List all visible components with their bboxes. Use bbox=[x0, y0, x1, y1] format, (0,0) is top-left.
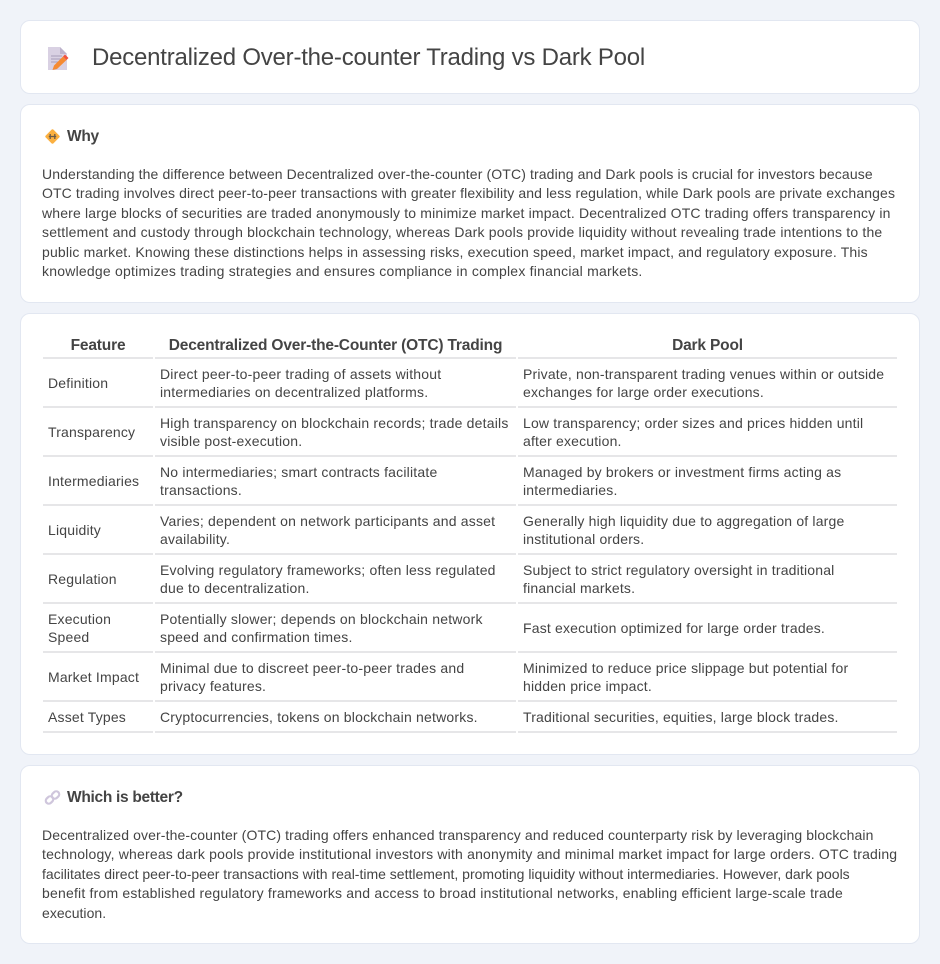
heading: why: Why bbox=[67, 128, 99, 145]
title: Decentralized Over-the-counter Trading vs Dark Pool bbox=[92, 44, 645, 71]
row: asset types bbox=[48, 709, 839, 725]
row: regulation: Subject to strict regulatory oversight in traditional bbox=[523, 562, 834, 578]
text: why paragraph bbox=[42, 166, 895, 279]
row: regulation: financial markets. bbox=[523, 580, 635, 596]
row: liquidity: availability. bbox=[160, 531, 230, 547]
row: definition: Private, non-transparent trading venues within or outside bbox=[523, 366, 884, 382]
row: market impact: privacy features. bbox=[160, 678, 266, 694]
row: intermediaries bbox=[48, 464, 841, 498]
row: liquidity: Liquidity bbox=[48, 522, 101, 538]
row: market impact bbox=[48, 660, 848, 694]
table header: Feature bbox=[71, 337, 125, 354]
text: why paragraph: OTC trading involves direct peer-to-peer transactions with greater flexibility and less regulation, while Dark pools are private exchanges bbox=[42, 185, 895, 201]
row: execution speed bbox=[48, 611, 825, 645]
table header bbox=[71, 337, 743, 354]
row: execution speed: Execution bbox=[48, 611, 111, 627]
row: definition bbox=[48, 366, 884, 400]
panel: title header bbox=[20, 20, 920, 94]
row: liquidity: institutional orders. bbox=[523, 531, 644, 547]
row: intermediaries: No intermediaries; smart contracts facilitate bbox=[160, 464, 437, 480]
row: transparency: after execution. bbox=[523, 433, 622, 449]
text: why paragraph: Understanding the difference between Decentralized over-the-counter (OTC) trading and Dark pools is crucial for investors because bbox=[42, 166, 873, 182]
row: asset types: Cryptocurrencies, tokens on blockchain networks. bbox=[160, 709, 478, 725]
text: which is better paragraph: technology, whereas dark pools provide institutional investors with anonymity and minimal market impact for large orders. OTC trading bbox=[42, 846, 897, 862]
text: which is better paragraph: facilitates direct peer-to-peer transactions with real-time settlement, promoting liquidity without intermediaries. However, dark pools bbox=[42, 866, 850, 882]
row: regulation: due to decentralization. bbox=[160, 580, 310, 596]
row: execution speed: Fast execution optimized for large order trades. bbox=[523, 620, 825, 636]
text: why paragraph: public market. Knowing these distinctions helps in assessing risks, execution speed, market impact, and regulatory exposure. This bbox=[42, 244, 868, 260]
panel: comparison table bbox=[20, 313, 920, 755]
row: transparency: Low transparency; order sizes and prices hidden until bbox=[523, 415, 863, 431]
row: transparency: visible post-execution. bbox=[160, 433, 302, 449]
row: definition: intermediaries on decentralized platforms. bbox=[160, 384, 428, 400]
text: why paragraph: knowledge optimizes trading strategies and ensures compliance in complex financial markets. bbox=[42, 263, 643, 279]
heading: which is better: Which is better? bbox=[67, 789, 183, 806]
row: liquidity: Generally high liquidity due to aggregation of large bbox=[523, 513, 844, 529]
row: regulation: Regulation bbox=[48, 571, 117, 587]
row: asset types: Asset Types bbox=[48, 709, 126, 725]
row: market impact: Minimized to reduce price slippage but potential for bbox=[523, 660, 848, 676]
row: intermediaries: Managed by brokers or investment firms acting as bbox=[523, 464, 841, 480]
text: which is better paragraph: benefit from established regulatory frameworks and access to broad institutional networks, enabling efficient large-scale trade bbox=[42, 885, 843, 901]
row: regulation bbox=[48, 562, 834, 596]
row: regulation: Evolving regulatory frameworks; often less regulated bbox=[160, 562, 496, 578]
row: market impact: hidden price impact. bbox=[523, 678, 652, 694]
panel: which is better bbox=[20, 765, 920, 944]
row: transparency: High transparency on blockchain records; trade details bbox=[160, 415, 509, 431]
row: intermediaries: Intermediaries bbox=[48, 473, 139, 489]
row: definition: Direct peer-to-peer trading of assets without bbox=[160, 366, 441, 382]
row: execution speed: Potentially slower; depends on blockchain network bbox=[160, 611, 483, 627]
row: liquidity bbox=[48, 513, 844, 547]
table header: Decentralized Over-the-Counter (OTC) Trading bbox=[169, 337, 502, 354]
table header: Dark Pool bbox=[672, 337, 743, 354]
panel: why bbox=[20, 104, 920, 303]
row: transparency: Transparency bbox=[48, 424, 135, 440]
row: market impact: Market Impact bbox=[48, 669, 139, 685]
row: intermediaries: transactions. bbox=[160, 482, 242, 498]
row: execution speed: Speed bbox=[48, 629, 89, 645]
text: which is better paragraph: execution. bbox=[42, 905, 106, 921]
icon: chain link bbox=[44, 790, 60, 805]
row: market impact: Minimal due to discreet peer-to-peer trades and bbox=[160, 660, 464, 676]
row: asset types: Traditional securities, equities, large block trades. bbox=[523, 709, 839, 725]
row: definition: Definition bbox=[48, 375, 108, 391]
icon: warning diamond bbox=[45, 129, 60, 144]
row: execution speed: speed and confirmation times. bbox=[160, 629, 353, 645]
row: liquidity: Varies; dependent on network participants and asset bbox=[160, 513, 495, 529]
text: why paragraph: settlement and custody through blockchain technology, whereas Dark pools provide liquidity without revealing trade intentions to the bbox=[42, 224, 882, 240]
row: intermediaries: intermediaries. bbox=[523, 482, 618, 498]
text: which is better paragraph bbox=[42, 827, 897, 921]
row: transparency bbox=[48, 415, 863, 449]
text: why paragraph: where large blocks of securities are traded anonymously to minimize market impact. Decentralized OTC trading offers transparency in bbox=[42, 205, 891, 221]
row: definition: exchanges for large order executions. bbox=[523, 384, 764, 400]
icon: document with pencil bbox=[48, 47, 68, 70]
text: which is better paragraph: Decentralized over-the-counter (OTC) trading offers enhanced transparency and reduced counterparty risk by leveraging blockchain bbox=[42, 827, 874, 843]
